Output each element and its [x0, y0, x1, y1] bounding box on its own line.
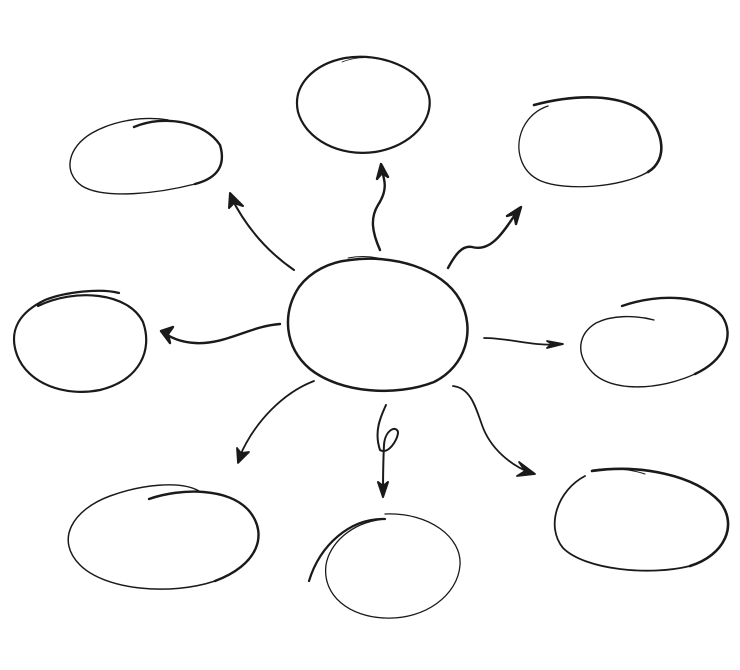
bubble: bottom right [555, 469, 728, 571]
arrow: top right [448, 207, 521, 268]
bubble: top right [519, 97, 661, 187]
bubble: right [581, 298, 728, 387]
bubble: top [297, 57, 430, 153]
bubble: bottom left [68, 485, 259, 589]
arrow: right [484, 338, 563, 348]
bubble: bottom [309, 514, 460, 618]
arrow: bottom right [453, 386, 535, 476]
bubble: left [14, 291, 146, 392]
arrow: bottom left [237, 381, 314, 463]
arrow: left [161, 324, 280, 343]
arrow: top [373, 164, 388, 250]
bubble: top left [70, 119, 222, 194]
arrow: bottom with loop [378, 405, 398, 497]
central bubble [288, 256, 468, 391]
arrow: top left [229, 193, 294, 270]
